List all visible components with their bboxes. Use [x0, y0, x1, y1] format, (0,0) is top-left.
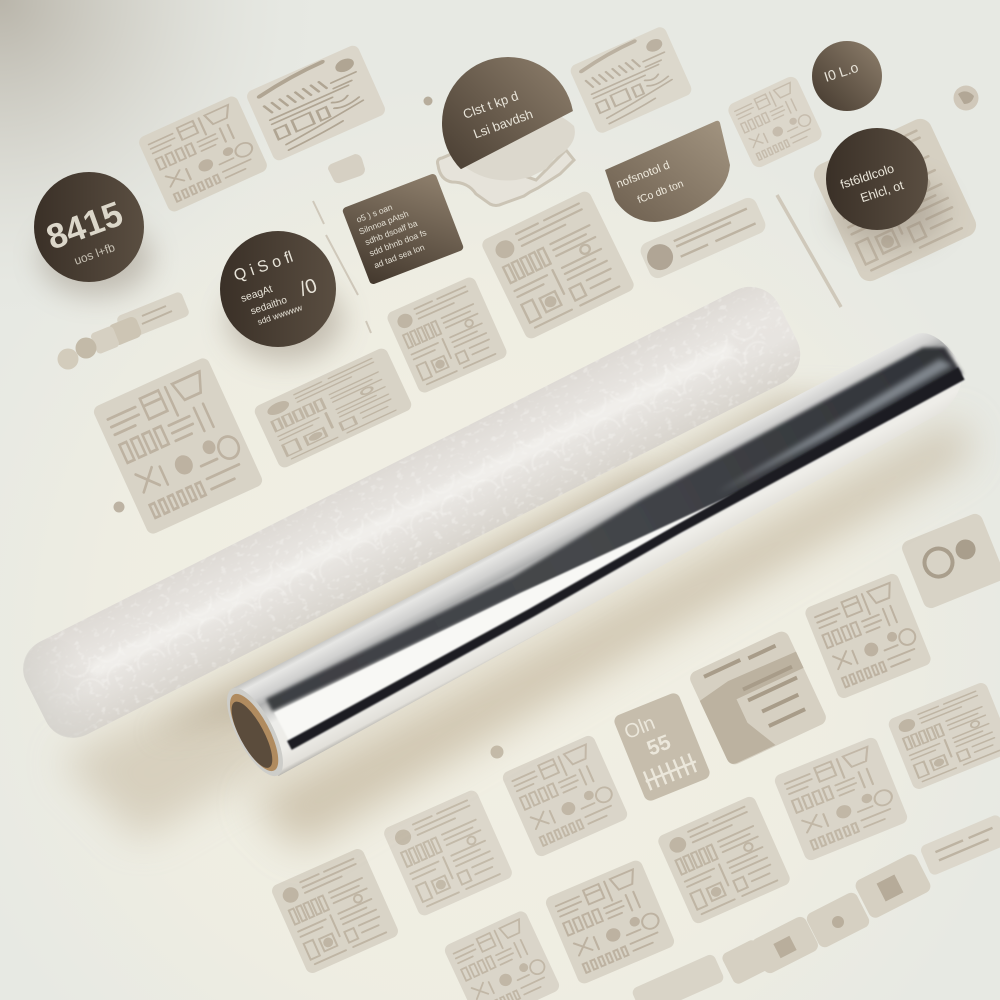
panel: card top 2 [245, 43, 387, 163]
panel: card top 1 [137, 94, 269, 214]
circle label: 8415 [34, 172, 152, 296]
panel: dark note card: Silnnoa pAtsh [357, 208, 410, 237]
panel: bubble strip 11 [58, 291, 190, 370]
background corner shade [0, 0, 500, 500]
panel: dark rounded label: fCo db ton [636, 178, 685, 206]
panel: dark rounded label [605, 121, 730, 222]
white highlight band [274, 471, 743, 741]
circle label: 8415: 8415 [41, 194, 128, 258]
panel: card bottom l [443, 909, 561, 1000]
dark reflection band upper [265, 337, 965, 739]
circle label: right [826, 128, 944, 246]
panel: dark rounded label: nofsnotol d [615, 159, 672, 191]
panel: dark note card [342, 173, 464, 285]
panel: bottom strip [720, 852, 933, 986]
panel: dark note card: sdd bhnb doa fs [368, 227, 428, 258]
bubble wrap roll [13, 276, 811, 748]
big circle label: Lsi bavdsh [471, 106, 535, 141]
foil roll [216, 316, 980, 785]
panel: card bottom k [270, 847, 400, 975]
panel: card bottom c [688, 629, 828, 767]
dot bottom [490, 746, 504, 758]
circle label: second: Q i S o fl [232, 249, 295, 285]
mid grey sheen [710, 355, 955, 495]
bottom cards group [270, 512, 1000, 1000]
panel: card bottom b [803, 572, 933, 700]
big circle label: Clst t kp d [461, 88, 520, 122]
panel: card top 4 [726, 74, 824, 170]
panel: dark note card: ad tad sea lon [372, 242, 426, 270]
blob under big circle [438, 57, 575, 206]
panel: dark note card: o5 ) s oan [355, 202, 394, 225]
black reflection line [280, 367, 970, 750]
small blob [328, 154, 365, 183]
panel: card bottom j [544, 858, 676, 986]
circle label: second: /0 [297, 275, 320, 301]
panel: card bottom i [656, 795, 792, 925]
panel: card center 6 [480, 189, 636, 341]
panel: card left 9 [92, 356, 264, 536]
big circle label [442, 57, 575, 189]
dot left [114, 502, 124, 512]
panel: card center 7 [385, 275, 509, 395]
panel: right small strip [919, 813, 1000, 877]
circle label: right: Ehlcl, ot [859, 178, 906, 205]
panel: card top 3 [568, 25, 694, 135]
panel: card center 8 [252, 346, 414, 470]
circle label: second: sdd wwwww [256, 302, 304, 327]
panel: lower strip [631, 953, 725, 1000]
panel: card bottom h [382, 788, 514, 918]
panel: card bottom d: Oln [621, 712, 658, 744]
shadows under rolls [60, 395, 970, 850]
foil end cap rim [216, 680, 294, 784]
small ball [954, 86, 978, 110]
circle label: small top [812, 41, 882, 111]
dot [424, 96, 432, 106]
panel: strip card 10 [638, 195, 768, 281]
top cards group [58, 25, 980, 536]
panel: card bottom d: 55 [644, 730, 674, 761]
panel: card bottom d [612, 691, 712, 803]
circle label: 8415: uos l+fb [72, 240, 117, 268]
panel: dark note card: sdhb dsoalf ba [364, 218, 419, 247]
panel: card top 5 [810, 115, 980, 285]
circle label: small top: I0 L.o [822, 59, 860, 85]
panel: card bottom g [501, 734, 629, 858]
panel: card bottom a [900, 512, 1000, 610]
cardboard core [221, 687, 288, 777]
panel: card bottom e [887, 681, 1000, 791]
circle label: second: sedaitho [249, 295, 289, 318]
divider lines [313, 195, 841, 333]
circle label: second: seagAt [239, 283, 274, 305]
circle label: second [220, 231, 343, 362]
circle label: right: fst6ldlcolo [839, 161, 896, 192]
panel: card bottom f [773, 736, 909, 862]
